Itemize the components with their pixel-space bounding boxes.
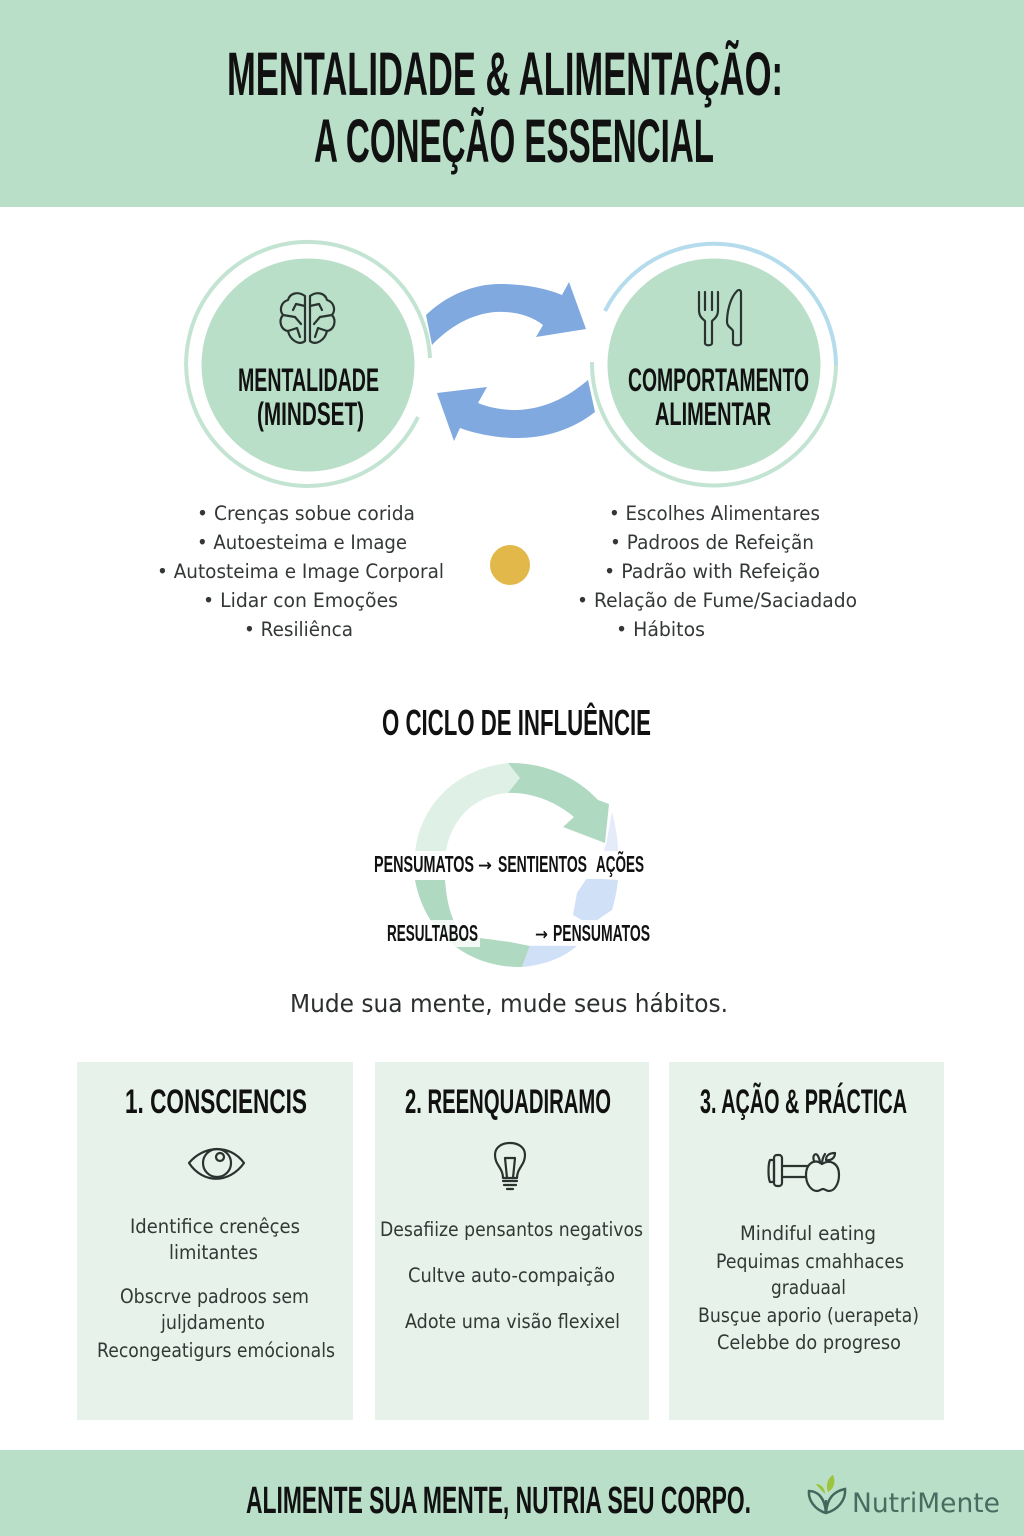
logo: NutriMente: NutriMente: [852, 1488, 1000, 1519]
logo: NutriMente: [809, 1475, 1000, 1519]
tagline: Mude sua mente, mude seus hábitos.: [290, 989, 728, 1018]
panel: eating behaviour circle: COMPORTAMENTO: [628, 362, 809, 398]
panel: step 2 reframing: 2. REENQUADIRAMO: [405, 1083, 611, 1121]
header panel with title: [0, 0, 1024, 207]
text: step 1 items: [97, 1215, 335, 1362]
text: step 3 items: graduaal: [771, 1276, 846, 1299]
text: step 3 items: Celebbe do progreso: [717, 1331, 901, 1354]
chart: influence cycle: [372, 763, 652, 967]
cycle labels row 2: [385, 920, 652, 947]
panel: mindset circle: (MINDSET): [257, 396, 364, 432]
icon: brain: [281, 293, 334, 343]
cycle labels row 1: [372, 850, 652, 879]
panel: eating behaviour circle: ALIMENTAR: [655, 396, 771, 432]
list: mindset topics: [157, 502, 444, 641]
text: step 3 items: Busçue aporio (uerapeta): [698, 1304, 919, 1327]
list: eating topics: [577, 502, 857, 641]
text: step 1 items: Obscrve padroos sem: [120, 1285, 309, 1308]
text: step 1 items: juljdamento: [160, 1311, 265, 1334]
text: step 2 items: Adote uma visão flexixel: [405, 1310, 620, 1333]
list: eating topics: • Relação de Fume/Saciadado: [577, 589, 857, 612]
text: step 2 items: Cultve auto-compaição: [408, 1264, 615, 1287]
list: eating topics: • Padrão with Refeição: [604, 560, 820, 583]
list: eating topics: • Padroos de Refeiçãn: [610, 531, 814, 554]
list: mindset topics: • Autosteima e Image Corporal: [157, 560, 444, 583]
panel: step 1 awareness: 1. CONSCIENCIS: [125, 1083, 307, 1121]
cycle labels row 1: →: [478, 856, 492, 876]
icon: fork and knife: [699, 290, 741, 345]
cycle labels row 1: AÇÕES: [596, 850, 644, 877]
yellow dot: [490, 545, 530, 585]
list: eating topics: • Hábitos: [616, 618, 705, 641]
text: step 2 items: Desafiize pensantos negativos: [380, 1218, 643, 1241]
list: mindset topics: • Crenças sobue corida: [197, 502, 415, 525]
text: step 1 items: limitantes: [169, 1241, 258, 1264]
icon: dumbbell and apple: [768, 1153, 839, 1191]
panel: step 3 action: [669, 1062, 944, 1420]
arrow: mindset to behaviour: [426, 282, 586, 345]
icon: light bulb: [495, 1143, 525, 1189]
text: step 3 items: [698, 1222, 919, 1354]
text: step 3 items: Pequimas cmahhaces: [716, 1250, 904, 1273]
list: mindset topics: • Resiliênca: [244, 618, 353, 641]
cycle labels row 2: RESULTABOS: [387, 920, 478, 946]
list: mindset topics: • Autoesteima e Image: [197, 531, 407, 554]
footer panel: [0, 1450, 1024, 1536]
panel: mindset circle: [186, 242, 430, 486]
panel: eating behaviour circle: [592, 244, 836, 486]
arrow: behaviour to mindset: [437, 380, 595, 441]
list: eating topics: • Escolhes Alimentares: [609, 502, 820, 525]
text: step 2 items: [380, 1218, 643, 1333]
panel: step 1 awareness: [77, 1062, 353, 1420]
text: step 1 items: Identifice crenêçes: [130, 1215, 300, 1238]
cycle labels row 1: PENSUMATOS: [374, 851, 474, 877]
heading: influence cycle: O CICLO DE INFLUÊNCIE: [382, 701, 651, 743]
text: step 1 items: Recongeatigurs emócionals: [97, 1339, 335, 1362]
cycle labels row 2: PENSUMATOS: [553, 920, 650, 946]
text: step 3 items: Mindiful eating: [740, 1222, 876, 1245]
panel: mindset circle: MENTALIDADE: [238, 362, 379, 398]
panel: step 2 reframing: [375, 1062, 649, 1420]
cycle labels row 1: SENTIENTOS: [498, 851, 587, 877]
cycle labels row 2: →: [535, 925, 548, 945]
list: mindset topics: • Lidar con Emoções: [203, 589, 398, 612]
icon: eye: [189, 1149, 244, 1179]
